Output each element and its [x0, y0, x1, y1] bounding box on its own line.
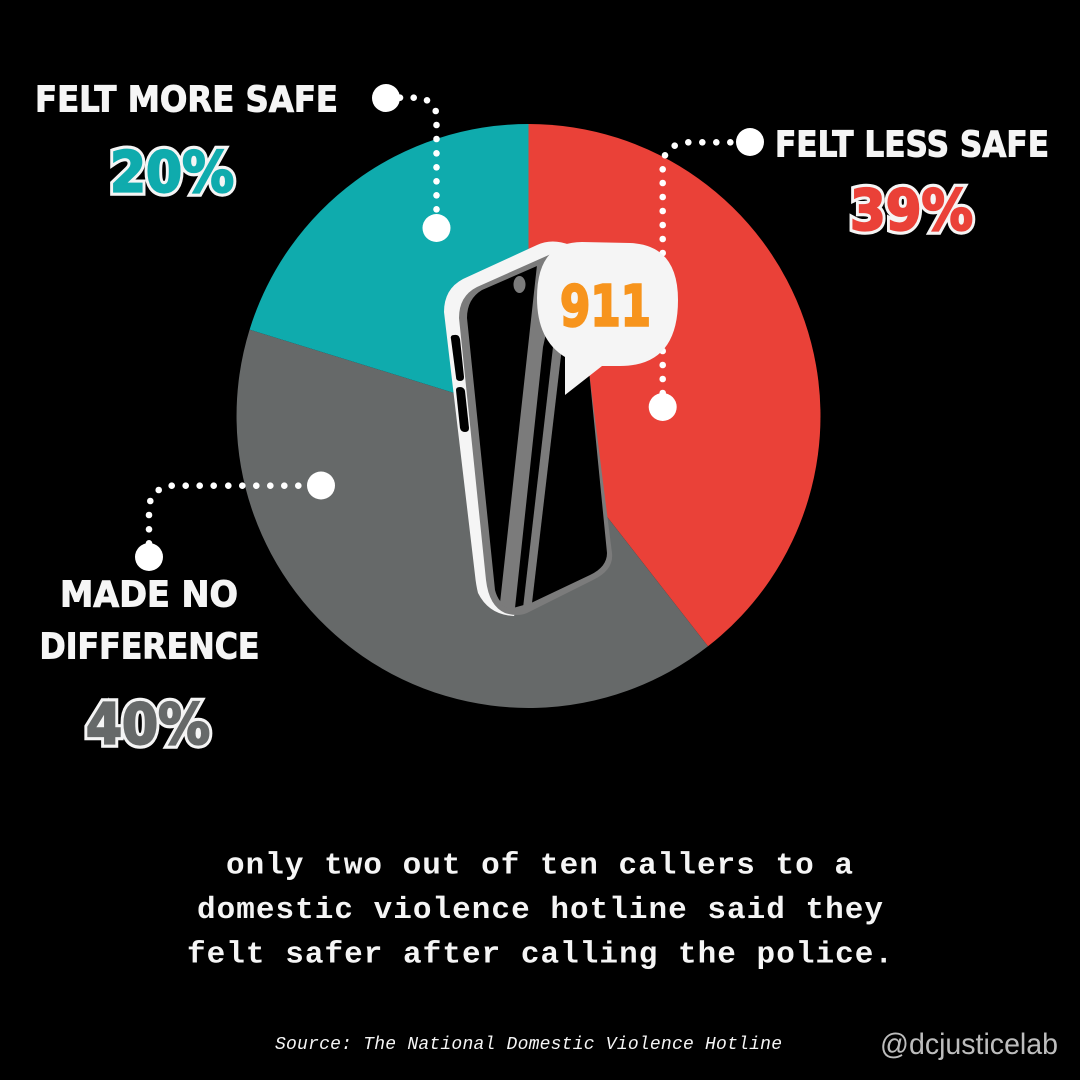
caption text: felt safer after calling the police.	[187, 938, 893, 972]
label: felt more safe	[35, 80, 338, 206]
value: 40%: 40%	[86, 692, 210, 758]
connector: made no difference	[135, 472, 335, 571]
icon: smartphone	[444, 242, 612, 616]
phone grey bezel	[459, 246, 612, 615]
value: 20%: 20%	[110, 140, 234, 206]
value: 39%: 39%	[850, 178, 973, 244]
label: felt more safe: FELT MORE SAFE	[35, 80, 338, 120]
screen glare stripes	[500, 248, 565, 608]
bubble text: 911	[560, 274, 651, 340]
label: made no difference: DIFFERENCE	[40, 626, 260, 668]
phone screen	[467, 266, 607, 608]
source line: Source: The National Domestic Violence Hotline	[275, 1035, 782, 1055]
phone white side frame	[444, 242, 570, 616]
slice: made no difference 40%	[237, 330, 708, 708]
value: 20%: 20%	[110, 140, 234, 206]
pie chart	[237, 124, 820, 708]
handle: @dcjusticelab	[880, 1028, 1058, 1061]
value: 40%: 40%	[86, 692, 210, 758]
value: 39%: 39%	[850, 178, 973, 244]
slice: felt more safe 20%	[250, 124, 528, 416]
slice: felt less safe 39%	[528, 124, 820, 646]
label: felt less safe	[775, 124, 1049, 244]
speech bubble: 911	[537, 242, 678, 395]
label: felt less safe: FELT LESS SAFE	[775, 124, 1049, 166]
connector: felt more safe	[372, 84, 450, 242]
caption text: domestic violence hotline said they	[197, 893, 883, 928]
label: made no difference: MADE NO	[60, 574, 238, 616]
label: made no difference	[40, 574, 260, 758]
caption text	[187, 848, 893, 972]
camera dot	[514, 276, 526, 293]
caption text: only two out of ten callers to a	[226, 848, 853, 884]
connector: felt less safe	[649, 128, 764, 421]
side buttons	[451, 335, 469, 432]
